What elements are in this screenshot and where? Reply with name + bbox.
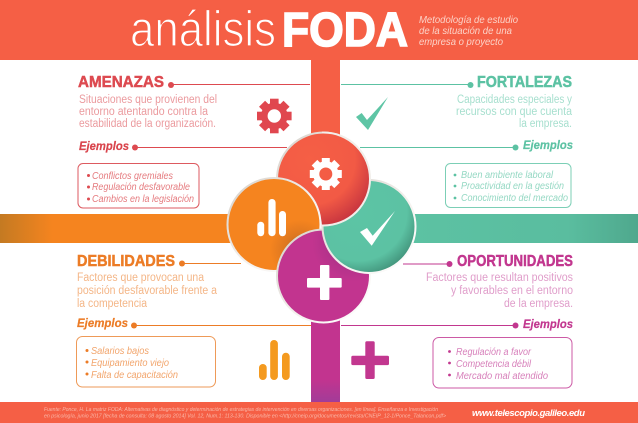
vertical bar: top — [311, 60, 340, 150]
subtitle: Metodología de estudio — [419, 14, 518, 26]
examples box: Salarios bajos — [91, 346, 149, 357]
description: oportunidades: y favorables en el entorno — [451, 285, 573, 297]
title: análisis — [130, 1, 276, 57]
description: amenazas: entorno atentando contra la — [79, 106, 209, 118]
source citation: Fuente: Ponce, H. La matriz FODA: Alternativas de diagnóstico y determinación de estrategias de intervención en diversas organizaciones. [en línea]. Enseñanza e Investigación — [44, 407, 438, 413]
description: debilidades: la competencia — [77, 298, 148, 310]
description: fortalezas: recursos con que cuenta — [456, 106, 573, 118]
subheading: ejemplos: Ejemplos — [523, 138, 573, 152]
footer band — [0, 402, 638, 423]
header band — [0, 0, 638, 60]
heading: debilidades: DEBILIDADES — [77, 253, 175, 270]
examples box — [433, 338, 572, 388]
icon: gear — [257, 99, 292, 133]
subheading: ejemplos: Ejemplos — [79, 139, 129, 153]
connector: ejemplos — [341, 322, 518, 328]
circle: orange — [228, 178, 320, 271]
horizontal bar: left — [0, 214, 240, 243]
icon: white gear — [310, 158, 342, 190]
description: oportunidades: de la empresa. — [504, 298, 573, 310]
examples box: Conocimiento del mercado — [461, 193, 568, 204]
examples box — [76, 336, 216, 387]
title — [130, 1, 408, 57]
description: fortalezas: Capacidades especiales y — [457, 94, 572, 106]
examples box: Conflictos gremiales — [92, 171, 173, 182]
connector: fortalezas — [341, 82, 474, 88]
circle: red overlap — [322, 132, 371, 226]
connector: debilidades — [179, 260, 241, 266]
description: amenazas: estabilidad de la organización. — [79, 118, 216, 130]
examples box: Falta de capacitación — [91, 370, 178, 381]
subtitle — [419, 14, 518, 48]
connector: ejemplos — [360, 144, 518, 150]
horizontal bar: right — [405, 214, 638, 243]
description: debilidades — [77, 272, 218, 310]
connector: oportunidades — [403, 261, 452, 267]
examples box: Proactividad en la gestión — [461, 181, 564, 192]
vertical bar: bottom — [311, 300, 340, 402]
source citation — [44, 407, 447, 420]
connector: amenazas — [168, 82, 310, 88]
circle: purple — [277, 230, 370, 322]
examples box — [78, 164, 199, 208]
heading: amenazas: AMENAZAS — [78, 74, 164, 91]
description: amenazas: Situaciones que provienen del — [79, 94, 217, 106]
source citation: en psicología, junio 2017 [fecha de consulta: 08 agosto 2014] Vol. 12, Num.1: 113-130. Disponible en <http://cneip.org/documentos/revista/CNEIP_12-1/Ponce_Talancon.pdf> — [44, 414, 447, 420]
description: oportunidades — [426, 272, 573, 310]
icon: white check — [360, 211, 395, 246]
description: debilidades: Factores que provocan una — [77, 272, 205, 284]
description: fortalezas — [456, 94, 573, 130]
description: oportunidades: Factores que resultan positivos — [426, 272, 573, 284]
description: amenazas — [79, 94, 217, 130]
connector: ejemplos — [131, 322, 311, 328]
panel: fortalezas — [341, 74, 573, 208]
description: debilidades: posición desfavorable frente a — [77, 285, 218, 297]
icon: white plus — [307, 265, 342, 300]
subtitle: de la situación de una — [419, 25, 512, 37]
subtitle: empresa o proyecto — [419, 36, 503, 48]
heading: fortalezas: FORTALEZAS — [477, 74, 572, 91]
description: fortalezas: la empresa. — [519, 118, 572, 130]
examples box: Equipamiento viejo — [91, 358, 169, 369]
connector: ejemplos — [132, 144, 287, 150]
circle: red — [277, 132, 370, 226]
examples box: Buen ambiente laboral — [461, 170, 554, 181]
examples box: Cambios en la legislación — [92, 194, 194, 205]
icon: check mark — [356, 97, 388, 130]
examples box: Regulación desfavorable — [92, 182, 190, 193]
panel: amenazas — [78, 74, 310, 208]
icon: white bars — [257, 199, 286, 236]
icon: plus — [351, 341, 389, 379]
examples box: Competencia débil — [456, 359, 532, 370]
circle: teal — [322, 180, 416, 273]
examples box — [446, 164, 571, 208]
panel: oportunidades — [341, 253, 573, 388]
icon: bar chart — [259, 340, 290, 380]
subheading: ejemplos: Ejemplos — [77, 316, 128, 330]
examples box: Mercado mal atendido — [456, 371, 548, 382]
panel: debilidades — [76, 253, 311, 387]
heading: oportunidades: OPORTUNIDADES — [457, 253, 573, 270]
title: FODA — [282, 4, 408, 57]
website url: www.telescopio.galileo.edu — [472, 408, 585, 419]
subheading: ejemplos: Ejemplos — [523, 317, 573, 331]
central swirl diagram — [228, 132, 416, 322]
examples box: Regulación a favor — [456, 347, 532, 358]
